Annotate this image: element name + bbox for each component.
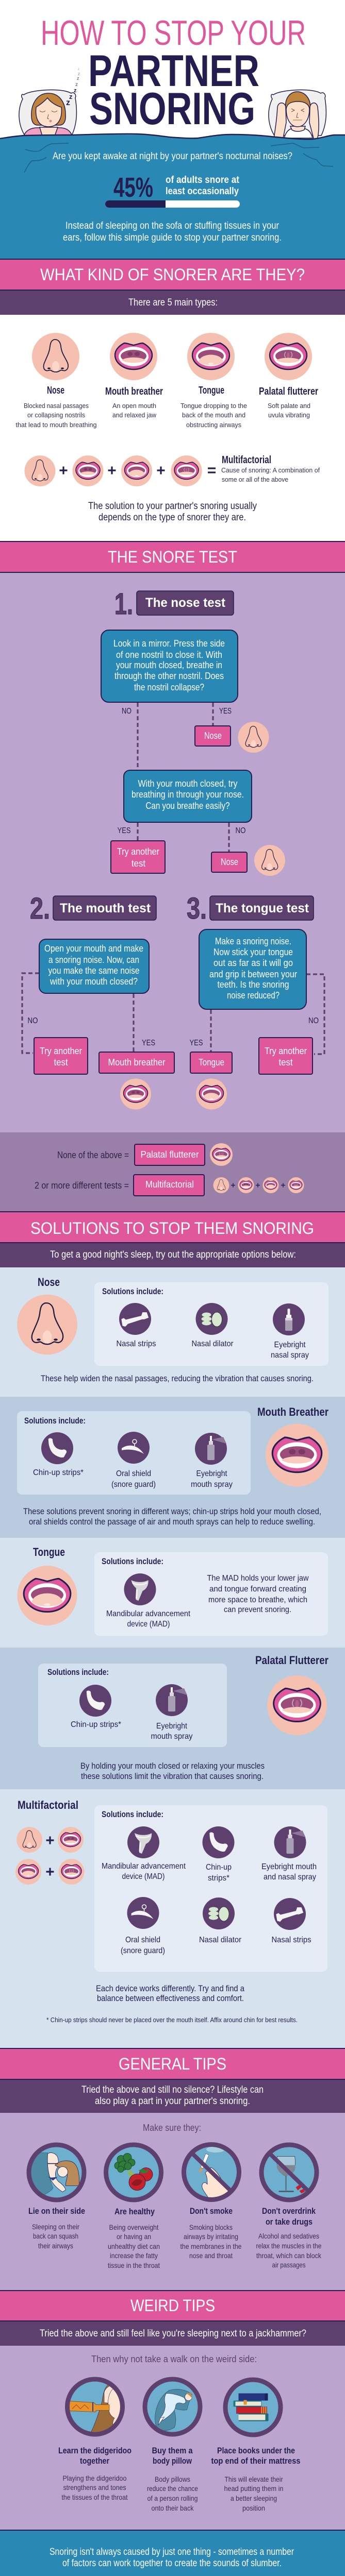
- flow arrows: nose test: [138, 703, 229, 852]
- text: weird side: Then why not take a walk on the weird side:: [91, 2354, 257, 2364]
- panel: multifactorial solutions: [0, 1789, 345, 2048]
- statistic: 45% of adults snore: [105, 172, 240, 208]
- panel: tongue solutions: The MAD holds your lower jaw: [207, 1574, 309, 1583]
- panel: nose solutions: [0, 1267, 345, 1397]
- type: nose: or collapsing nostrils: [27, 411, 85, 419]
- icon: zzz snoring: z: [78, 68, 79, 71]
- text: make sure they: Make sure they:: [143, 2123, 201, 2133]
- panel: palatal flutterer solutions: Eyebright: [156, 1722, 187, 1731]
- subheading: 5 main types: [0, 291, 345, 315]
- label: no: NO: [122, 707, 132, 716]
- tip: learn the didgeridoo: Playing the didgeridoo: [63, 2474, 127, 2482]
- tip: buy a body pillow: [145, 2379, 200, 2512]
- panel: palatal flutterer solutions: By holding your mouth closed or relaxing your muscles: [80, 1761, 265, 1771]
- statistic: 45% of adults snore: 45%: [113, 172, 153, 203]
- result: try another test: [111, 841, 165, 873]
- result: try another test, left: Try another: [40, 1046, 82, 1056]
- tip: place books under mattress: a better sleeping: [231, 2494, 277, 2502]
- panel: combined results background: [0, 1132, 345, 1212]
- result: nose: [195, 722, 269, 753]
- heading: what kind of snorer: [0, 259, 345, 291]
- subheading: lifestyle: also play a part in your partner's snoring.: [95, 2096, 250, 2107]
- panel: multifactorial solutions: Nasal strips: [271, 1936, 311, 1944]
- tip: are healthy: unhealthy diet can: [108, 2242, 160, 2250]
- type: tongue: [180, 333, 247, 429]
- test 2 heading: the mouth test: The mouth test: [60, 901, 151, 916]
- panel: mouth breather solutions: Solutions include:: [24, 1416, 86, 1426]
- panel: closing message: Snoring isn't always caused by just one thing - sometimes a number: [50, 2547, 294, 2557]
- title: [41, 13, 306, 134]
- question box: breathe easily: [124, 770, 252, 822]
- type: tongue: Tongue dropping to the: [180, 402, 247, 410]
- panel: multifactorial solutions: * Chin-up strips should never be placed over the mouth itself. Affix around chin for best results.: [46, 2016, 298, 2024]
- heading: the snore test: THE SNORE TEST: [108, 548, 237, 566]
- tip: don't overdrink or take drugs: relax the muscles in the: [256, 2242, 322, 2250]
- tip: don't overdrink or take drugs: Don't overdrink: [262, 2206, 316, 2216]
- statistic: 45% of adults snore: of adults snore at: [166, 175, 240, 185]
- title: SNORING: [89, 83, 255, 134]
- tip: lie on their side: Sleeping on their: [32, 2223, 79, 2231]
- panel: multifactorial solutions: Solutions include:: [102, 1809, 163, 1819]
- tip: place books under mattress: [211, 2380, 300, 2512]
- icon: zzz snoring: z: [66, 98, 70, 107]
- question box: breathe easily: Can you breathe easily?: [145, 801, 230, 811]
- result: nose: [211, 845, 285, 876]
- test 3 heading: the tongue test: [187, 892, 314, 925]
- panel: nose solutions: Nasal strips: [117, 1340, 156, 1348]
- labels: yes and no, tongue test: YES: [190, 1039, 203, 1047]
- question box: tongue test: teeth. Is the snoring: [218, 979, 289, 990]
- tip: buy a body pillow: Buy them a: [152, 2446, 193, 2455]
- tip: are healthy: Being overweight: [109, 2223, 159, 2231]
- question box: tongue test: and grip it between your: [209, 969, 297, 979]
- text: solution depends on type: depends on the type of snorer they are.: [98, 512, 246, 523]
- tip: are healthy: tissue in the throat: [108, 2261, 160, 2269]
- question box: tongue test: Make a snoring noise.: [215, 936, 291, 946]
- result row: palatal flutterer: Palatal flutterer: [140, 1149, 199, 1160]
- labels: yes and no, tongue test: NO: [308, 1016, 319, 1025]
- tip: learn the didgeridoo: the tissues of the throat: [62, 2493, 128, 2501]
- labels: no and yes, mouth test: NO: [28, 1016, 38, 1025]
- panel: tongue solutions: device (MAD): [127, 1620, 170, 1629]
- tip: place books under mattress: This will elevate their: [225, 2475, 283, 2483]
- heading: the snore test: [0, 541, 345, 573]
- result row: multifactorial: 2 or more different tests =: [35, 1180, 129, 1191]
- tip: are healthy: or having an: [117, 2232, 151, 2241]
- type: palatal flutterer: Palatal flutterer: [259, 386, 318, 397]
- question box: nostril collapse: the nostril collapse?: [134, 682, 204, 692]
- subheading: appropriate options: To get a good night's sleep, try out the appropriate options below:: [50, 1249, 296, 1260]
- question box: nostril collapse: your mouth closed, breathe in: [116, 660, 222, 670]
- subheading: jackhammer: [0, 2321, 345, 2346]
- type: nose: that lead to mouth breathing: [15, 421, 97, 429]
- result: try another test: test: [132, 858, 145, 869]
- icon: zzz snoring: z: [75, 82, 78, 88]
- panel: tongue solutions: more space to breathe, which: [208, 1596, 307, 1604]
- panel: multifactorial solutions: balance between effectiveness and comfort.: [97, 1993, 244, 2003]
- panel: snore test background: [0, 573, 345, 1132]
- panel: mouth breather solutions: Oral shield: [116, 1469, 151, 1478]
- type: palatal flutterer: [259, 333, 318, 419]
- question box: nostril collapse: Look in a mirror. Press the side: [113, 638, 225, 649]
- tip: place books under mattress: Place books under the: [217, 2446, 295, 2455]
- tip: learn the didgeridoo: together: [80, 2456, 109, 2466]
- label: yes: YES: [118, 826, 131, 835]
- panel: multifactorial solutions: Mandibular advancement: [102, 1862, 186, 1871]
- tip: place books under mattress: top end of their mattress: [211, 2456, 300, 2466]
- test 3 heading: the tongue test: The tongue test: [216, 901, 309, 916]
- tip: buy a body pillow: of a person rolling: [147, 2494, 198, 2502]
- type: mouth breather: and relaxed jaw: [112, 411, 157, 419]
- text: solution depends on type: [88, 501, 257, 523]
- panel: mouth breather solutions: Chin-up strips*: [33, 1468, 84, 1477]
- panel: weird tips background: [0, 2346, 345, 2530]
- panel: tongue solutions: Solutions include:: [102, 1556, 163, 1566]
- label: yes: YES: [219, 707, 232, 716]
- heading: general tips: GENERAL TIPS: [119, 2055, 226, 2073]
- tip: don't smoke: [180, 2144, 242, 2260]
- tip: don't smoke: Don't smoke: [190, 2206, 233, 2216]
- type: multifactorial equation: Cause of snoring: A combination of: [221, 466, 320, 474]
- type: mouth breather: Mouth breather: [105, 386, 163, 397]
- test 1 heading: the nose test: 1.: [114, 587, 133, 621]
- subheading: appropriate options: [0, 1243, 345, 1267]
- panel: mouth breather solutions: mouth spray: [191, 1480, 233, 1489]
- result: tongue: Tongue: [199, 1057, 224, 1067]
- panel: multifactorial solutions: Each device works differently. Try and find a: [96, 1984, 244, 1993]
- type: multifactorial equation: Multifactorial: [222, 454, 271, 466]
- test 2 heading: the mouth test: [30, 892, 156, 925]
- tip: don't smoke: nose and throat: [189, 2251, 233, 2260]
- intro paragraph: [63, 221, 282, 243]
- type: nose: [15, 333, 97, 429]
- tip: don't overdrink or take drugs: [256, 2145, 322, 2269]
- panel: mouth breather solutions: Mouth Breather: [257, 1405, 328, 1418]
- panel: nose solutions: Nose: [38, 1276, 60, 1289]
- labels: yes and no, tongue test: [190, 1016, 319, 1047]
- tip: are healthy: Are healthy: [114, 2207, 155, 2216]
- type: tongue: back of the mouth and: [182, 411, 245, 419]
- panel: multifactorial solutions: strips*: [208, 1874, 229, 1883]
- panel: palatal flutterer solutions: these solutions limit the vibration that causes snoring.: [81, 1771, 264, 1781]
- tip: don't smoke: Smoking blocks: [189, 2223, 233, 2231]
- type: multifactorial equation: some or all of the above: [222, 476, 288, 483]
- text: solution depends on type: The solution to your partner's snoring usually: [88, 501, 257, 512]
- heading: weird tips: WEIRD TIPS: [130, 2296, 215, 2315]
- tip: don't overdrink or take drugs: Alcohol and sedatives: [258, 2232, 319, 2240]
- tip: buy a body pillow: Body pillows: [155, 2475, 190, 2483]
- label: no: NO: [235, 826, 245, 835]
- tip: lie on their side: [28, 2145, 85, 2250]
- tip: are healthy: increase the fatty: [110, 2251, 158, 2260]
- question box: nostril collapse: through the other nostril. Does: [114, 671, 224, 681]
- illustration: annoyed man covering ears: [269, 90, 326, 140]
- result row: multifactorial: Multifactorial: [145, 1179, 194, 1190]
- panel: multifactorial solutions: and nasal spray: [264, 1873, 316, 1882]
- panel: nose solutions: nasal spray: [271, 1351, 309, 1360]
- panel: multifactorial solutions: Chin-up: [206, 1863, 232, 1872]
- tip: lie on their side: their airways: [38, 2242, 73, 2250]
- result: try another test, right: Try another: [265, 1046, 307, 1056]
- question box: mouth test: Open your mouth and make: [44, 943, 143, 954]
- result: try another test, right: test: [278, 1057, 293, 1067]
- panel: nose solutions: Nasal dilator: [192, 1340, 234, 1348]
- question box: nostril collapse: [101, 630, 238, 702]
- panel: tongue solutions: Tongue: [33, 1546, 65, 1558]
- type: mouth breather: An open mouth: [112, 402, 156, 410]
- panel: palatal flutterer solutions: Chin-up strips*: [71, 1720, 121, 1729]
- panel: multifactorial solutions: Nasal dilator: [199, 1936, 242, 1944]
- tip: don't overdrink or take drugs: or take drugs: [266, 2217, 313, 2227]
- panel: tongue solutions: Mandibular advancement: [106, 1609, 190, 1618]
- result: tongue: [190, 1052, 232, 1109]
- panel: closing message: of factors can work together to create the sounds of slumber.: [62, 2558, 282, 2569]
- tip: place books under mattress: head putting them in: [224, 2484, 284, 2493]
- tip: lie on their side: Lie on their side: [28, 2206, 85, 2216]
- type: nose: Blocked nasal passages: [24, 402, 89, 410]
- blanket panel: [0, 134, 345, 259]
- intro paragraph: ears, follow this simple guide to stop your partner snoring.: [63, 232, 282, 243]
- panel: tongue solutions: and tongue forward creating: [209, 1585, 306, 1594]
- test 2 heading: the mouth test: 2.: [30, 892, 50, 925]
- statistic: 45% of adults snore: least occasionally: [166, 186, 239, 197]
- question box: tongue test: noise reduced?: [227, 990, 280, 1001]
- panel: general tips background: [0, 2113, 345, 2290]
- question box: breathe easily: With your mouth closed, try: [138, 778, 237, 789]
- panel: mouth breather solutions: [0, 1397, 345, 1538]
- heading: weird tips: [0, 2290, 345, 2321]
- question box: mouth test: with your mouth closed?: [50, 976, 138, 987]
- icon: zzz snoring: z: [78, 72, 80, 76]
- type: tongue: Tongue: [199, 385, 224, 396]
- subheading: jackhammer: Tried the above and still feel like you're sleeping next to a jackhammer?: [40, 2328, 306, 2339]
- type: tongue: obstructing airways: [186, 421, 241, 429]
- result: mouth breather: Mouth breather: [108, 1057, 165, 1067]
- tip: learn the didgeridoo: [58, 2379, 132, 2501]
- subheading: 5 main types: There are 5 main types:: [128, 297, 218, 308]
- tip: don't smoke: the membranes in the: [180, 2242, 242, 2250]
- heading: what kind of snorer: WHAT KIND OF SNORER ARE THEY?: [40, 265, 305, 284]
- icon: zzz snoring: z: [77, 76, 79, 81]
- result row: palatal flutterer: None of the above =: [57, 1150, 129, 1160]
- result row: palatal flutterer: [57, 1143, 233, 1166]
- tip: learn the didgeridoo: strengthens and tones: [63, 2483, 126, 2492]
- tip: buy a body pillow: onto their back: [152, 2504, 194, 2512]
- intro question: Are you kept awake at night by your partner's nocturnal noises?: [53, 151, 292, 162]
- question box: tongue test: [199, 929, 306, 1009]
- title: PARTNER: [88, 46, 259, 96]
- flow arrows: mouth and tongue tests: [22, 973, 324, 1054]
- panel: tongue solutions: [0, 1538, 345, 1648]
- panel: tongue solutions: can prevent snoring.: [224, 1605, 291, 1614]
- result row: multifactorial: [35, 1175, 304, 1196]
- panel: palatal flutterer solutions: [0, 1648, 345, 1789]
- icon: zzz snoring: [66, 68, 80, 107]
- question box: nostril collapse: of one nostril to close it. With: [116, 650, 222, 660]
- result: try another test, left: [34, 1038, 88, 1074]
- panel: multifactorial solutions: Multifactorial: [18, 1799, 78, 1811]
- panel: mouth breather solutions: (snore guard): [111, 1480, 156, 1489]
- panel: nose solutions: Eyebright: [274, 1341, 306, 1349]
- tip: buy a body pillow: reduce the chance: [147, 2484, 198, 2493]
- result: try another test, left: test: [54, 1057, 68, 1067]
- result: try another test: Try another: [117, 846, 159, 857]
- panel: palatal flutterer solutions: mouth spray: [151, 1732, 193, 1741]
- tip: don't overdrink or take drugs: throat, which can block: [256, 2251, 322, 2260]
- panel: multifactorial solutions: Eyebright mouth: [261, 1862, 317, 1871]
- tip: are healthy: [106, 2145, 161, 2269]
- panel: nose solutions: Solutions include:: [102, 1286, 163, 1296]
- panel: multifactorial solutions: device (MAD): [122, 1872, 165, 1881]
- panel: mouth breather solutions: Eyebright: [196, 1469, 227, 1478]
- type: palatal flutterer: uvula vibrating: [268, 411, 310, 419]
- icon: zzz snoring: z: [69, 93, 73, 100]
- question box: tongue test: Now stick your tongue: [213, 947, 293, 957]
- result: nose: Nose: [204, 731, 222, 741]
- test 1 heading: the nose test: The nose test: [145, 596, 226, 610]
- panel: multifactorial solutions: Oral shield: [125, 1936, 160, 1944]
- tip: learn the didgeridoo: Learn the didgeridoo: [58, 2446, 132, 2455]
- labels: no and yes, mouth test: YES: [142, 1039, 155, 1047]
- illustration: snoring woman on pillow: [19, 90, 76, 136]
- type: mouth breather: [105, 333, 163, 419]
- heading: general tips: [0, 2048, 345, 2080]
- type: palatal flutterer: Soft palate and: [268, 402, 310, 410]
- type: nose: Nose: [47, 385, 64, 396]
- tip: buy a body pillow: body pillow: [153, 2456, 192, 2466]
- icon: zzz snoring: z: [74, 88, 77, 94]
- tip: don't overdrink or take drugs: air passages: [272, 2261, 305, 2269]
- heading: solutions: [0, 1211, 345, 1243]
- test 1 heading: the nose test: [114, 587, 234, 621]
- question box: breathe easily: breathing in through your nose.: [132, 789, 244, 800]
- panel: multifactorial solutions: (snore guard): [121, 1946, 165, 1955]
- tip: lie on their side: back can squash: [33, 2232, 78, 2240]
- question box: mouth test: [39, 939, 149, 993]
- tip: don't smoke: airways by irritating: [184, 2232, 238, 2241]
- panel: palatal flutterer solutions: Solutions include:: [47, 1667, 109, 1677]
- question box: mouth test: a snoring noise. Now, can: [48, 955, 139, 965]
- tip: place books under mattress: position: [242, 2504, 265, 2512]
- labels: no and yes, mouth test: [28, 1016, 155, 1047]
- heading: solutions: SOLUTIONS TO STOP THEM SNORING: [30, 1219, 314, 1238]
- type: multifactorial equation: [25, 454, 320, 486]
- intro paragraph: Instead of sleeping on the sofa or stuffing tissues in your: [65, 221, 280, 231]
- result: mouth breather: [99, 1052, 174, 1109]
- question box: tongue test: out as far as it will go: [213, 958, 293, 968]
- question box: mouth test: you make the same noise: [48, 965, 139, 976]
- result: nose: Nose: [221, 857, 238, 867]
- panel: closing message: [0, 2530, 345, 2576]
- test 3 heading: the tongue test: 3.: [187, 892, 207, 925]
- result: try another test, right: [259, 1038, 313, 1074]
- subheading: lifestyle: Tried the above and still no silence? Lifestyle can: [81, 2084, 264, 2095]
- panel: palatal flutterer solutions: Palatal Flutterer: [255, 1654, 328, 1667]
- subheading: lifestyle: [0, 2080, 345, 2113]
